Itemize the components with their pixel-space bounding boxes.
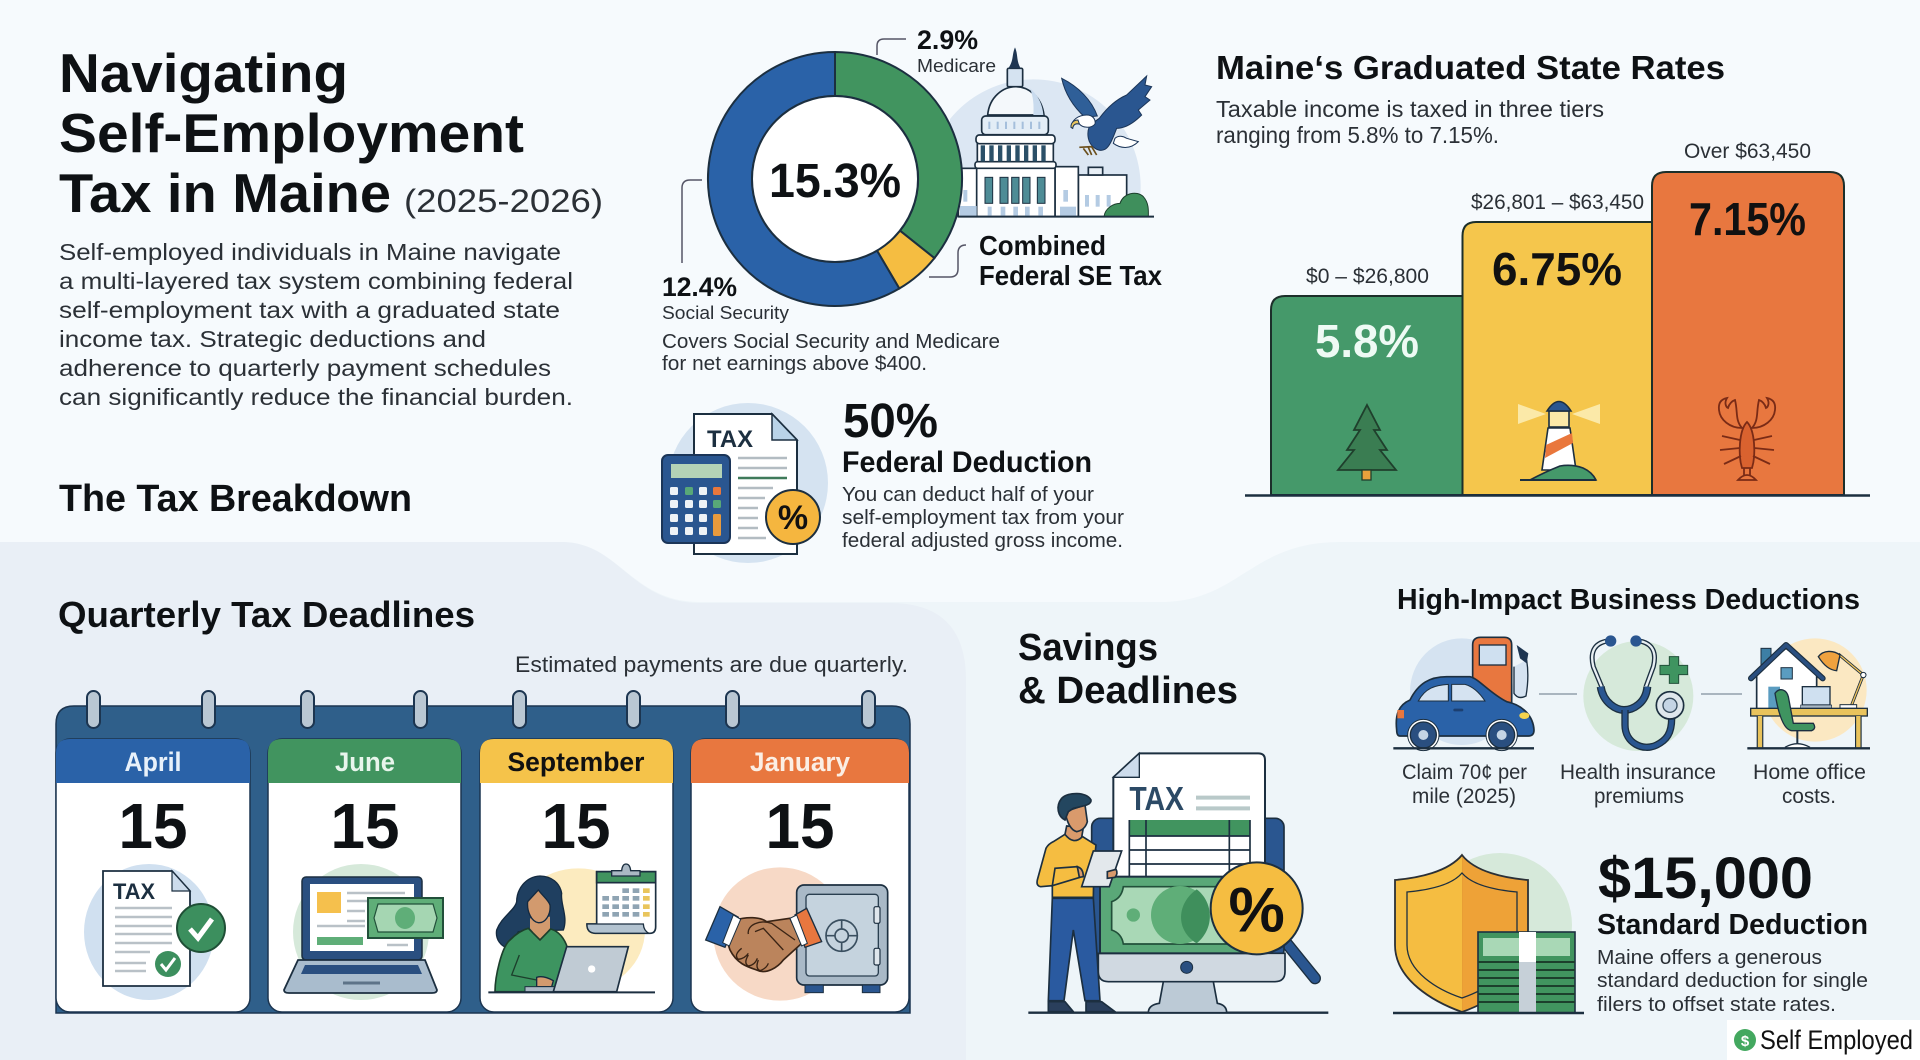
icon: tax form with checks: TAX xyxy=(113,879,155,904)
subheading: tiers: ranging from 5.8% to 7.15%. xyxy=(1216,122,1499,148)
heading: savings and deadlines: Savings xyxy=(1018,627,1158,669)
heading: savings and deadlines: & Deadlines xyxy=(1018,670,1238,712)
icon: handshake and safe xyxy=(706,867,888,1001)
callout: combined federal se tax: Combined xyxy=(979,230,1106,261)
callout: combined federal se tax: Federal SE Tax xyxy=(979,260,1162,291)
icon: car and fuel pump xyxy=(1393,637,1534,751)
bar: 7.15 percent: 7.15% xyxy=(1689,193,1806,245)
stat: 50 percent federal deduction: federal adjusted gross income. xyxy=(842,529,1123,552)
intro paragraph: income tax. Strategic deductions and xyxy=(59,326,486,352)
note: covers social security and medicare: Covers Social Security and Medicare xyxy=(662,331,1000,353)
icon: eagle xyxy=(1062,76,1152,155)
stat: 15,000 standard deduction: filers to offset state rates. xyxy=(1597,993,1836,1016)
bar: 5.8 percent xyxy=(1271,265,1462,495)
stat: 15,000 standard deduction xyxy=(1597,846,1868,1016)
label: claim 70 cents per mile xyxy=(1402,761,1527,808)
callout: combined federal se tax xyxy=(979,230,1162,291)
stat: 15,000 standard deduction: standard deduction for single xyxy=(1597,969,1868,992)
bar: 7.15 percent xyxy=(1652,140,1844,495)
label: home office costs xyxy=(1753,761,1866,808)
callout: social security xyxy=(662,272,789,323)
donut segment: social security xyxy=(708,52,899,306)
intro paragraph: a multi-layered tax system combining federal xyxy=(59,268,573,294)
calendar xyxy=(56,691,910,1013)
icon: lobster xyxy=(1719,398,1775,480)
heading: savings and deadlines xyxy=(1018,627,1238,712)
intro paragraph: Self-employed individuals in Maine navigate xyxy=(59,239,561,265)
stat: 50 percent federal deduction xyxy=(842,395,1124,552)
calendar rings xyxy=(87,691,875,728)
deduction item: home office xyxy=(1747,638,1870,808)
label: home office costs: Home office xyxy=(1753,761,1866,784)
icon: house and desk xyxy=(1747,638,1870,748)
calendar card: april: April xyxy=(124,747,182,777)
subheading: tiers: Taxable income is taxed in three tiers xyxy=(1216,96,1604,122)
calendar card: january: January xyxy=(750,747,850,777)
icon: tax document and calculator: TAX xyxy=(707,426,753,453)
calendar card: june: 15 xyxy=(330,790,400,862)
note: covers social security and medicare xyxy=(662,331,1000,375)
icon: laptop and cash xyxy=(284,864,443,1000)
intro paragraph: adherence to quarterly payment schedules xyxy=(59,355,551,381)
label: health insurance premiums: Health insurance xyxy=(1560,761,1716,784)
figure: person with tablet xyxy=(1037,794,1122,1012)
icon: stethoscope xyxy=(1583,635,1693,751)
intro paragraph: self-employment tax with a graduated state xyxy=(59,297,560,323)
icon: tax document and calculator: % xyxy=(778,499,808,537)
heading: maine's graduated state rates: Maine‘s Graduated State Rates xyxy=(1216,49,1725,86)
heading: the tax breakdown: The Tax Breakdown xyxy=(59,478,412,520)
title: Tax in Maine xyxy=(59,162,391,224)
bar: 5.8 percent: $0 – $26,800 xyxy=(1306,265,1429,288)
donut chart: 15.3 percent xyxy=(708,52,962,306)
calendar card: january xyxy=(691,739,909,1012)
bar: 5.8 percent: 5.8% xyxy=(1315,315,1419,367)
subheading: tiers xyxy=(1216,96,1604,148)
calendar card: september: September xyxy=(508,747,645,777)
calendar card: september xyxy=(480,739,673,1012)
illustration: capitol and eagle xyxy=(950,48,1154,218)
bar: 7.15 percent: Over $63,450 xyxy=(1684,140,1811,163)
title: Navigating xyxy=(59,42,348,104)
intro paragraph: can significantly reduce the financial burden. xyxy=(59,384,573,410)
panel: quarterly deadlines background xyxy=(0,542,966,1060)
stat: 15,000 standard deduction: Standard Deduction xyxy=(1597,909,1868,941)
bar: 6.75 percent: $26,801 – $63,450 xyxy=(1471,191,1644,214)
icon: tax document and calculator xyxy=(662,403,828,563)
stat: 50 percent federal deduction: You can deduct half of your xyxy=(842,483,1094,506)
note: covers social security and medicare: for net earnings above $400. xyxy=(662,353,927,375)
donut segment: accent xyxy=(877,231,934,288)
stat: 50 percent federal deduction: 50% xyxy=(843,395,938,448)
intro paragraph xyxy=(59,239,573,410)
callout: social security: 12.4% xyxy=(662,272,737,302)
stat: 15,000 standard deduction: $15,000 xyxy=(1598,846,1813,911)
heading: quarterly tax deadlines: Quarterly Tax Deadlines xyxy=(58,594,475,635)
bar: 6.75 percent xyxy=(1462,191,1652,495)
badge: self employed xyxy=(1727,1020,1920,1060)
label: health insurance premiums xyxy=(1560,761,1716,808)
stat: 50 percent federal deduction: Federal Deduction xyxy=(842,446,1092,479)
deduction item: health insurance xyxy=(1560,635,1716,808)
calendar card: april xyxy=(56,739,250,1012)
label: claim 70 cents per mile: mile (2025) xyxy=(1412,785,1516,808)
label: claim 70 cents per mile: Claim 70¢ per xyxy=(1402,761,1527,784)
badge: self employed: $ xyxy=(1741,1033,1750,1050)
bar chart: state rates xyxy=(1245,140,1870,496)
calendar card: january: 15 xyxy=(766,790,834,862)
illustration: person with tax document and monitor: TAX xyxy=(1129,781,1184,818)
donut centre value: 15.3% xyxy=(769,155,901,208)
note: estimated payments: Estimated payments are due quarterly. xyxy=(515,652,908,677)
leader lines xyxy=(682,39,966,277)
label: home office costs: costs. xyxy=(1782,785,1836,808)
callout: medicare: 2.9% xyxy=(917,25,978,55)
icon: lighthouse xyxy=(1518,402,1600,480)
title: (2025-2026) xyxy=(404,183,603,219)
calendar card: september: 15 xyxy=(542,790,610,862)
icon: woman at laptop with calendar xyxy=(488,864,656,992)
icon: shield and cash stack xyxy=(1393,853,1584,1013)
label: health insurance premiums: premiums xyxy=(1594,785,1684,808)
calendar card: april: 15 xyxy=(118,790,188,862)
title xyxy=(59,42,603,224)
calendar card: june xyxy=(268,739,461,1012)
stat: 15,000 standard deduction: Maine offers a generous xyxy=(1597,946,1822,969)
stat: 50 percent federal deduction: self-employment tax from your xyxy=(842,506,1124,529)
calendar card: june: June xyxy=(335,747,395,777)
bar: 6.75 percent: 6.75% xyxy=(1492,243,1622,295)
callout: medicare: Medicare xyxy=(917,56,996,76)
icon: tax form with checks xyxy=(84,864,225,1000)
donut segment: medicare xyxy=(835,52,962,258)
callout: social security: Social Security xyxy=(662,303,789,323)
illustration: person with tax document and monitor: % xyxy=(1229,876,1285,946)
heading: high-impact business deductions: High-Impact Business Deductions xyxy=(1397,584,1860,616)
title: Self-Employment xyxy=(59,102,524,164)
callout: medicare xyxy=(917,25,996,76)
illustration: person with tax document and monitor xyxy=(1028,753,1328,1013)
icon: pine tree xyxy=(1338,405,1396,470)
deduction item: mileage xyxy=(1393,637,1534,808)
